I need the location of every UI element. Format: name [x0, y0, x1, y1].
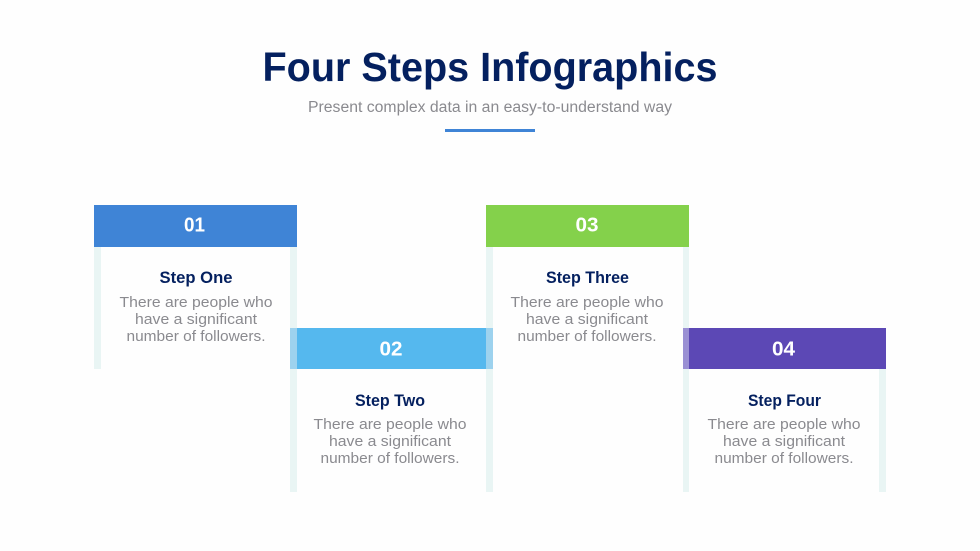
header bar overlap, right: [486, 328, 493, 369]
panel: step one: [94, 205, 297, 369]
heading: step three: Step Three: [546, 269, 629, 287]
body text: step two: [314, 416, 466, 467]
body text: step three: have a significant: [526, 311, 649, 328]
left side strip, step one: [94, 247, 101, 369]
heading: step two: Step Two: [355, 392, 425, 410]
number 03: 03: [576, 214, 598, 236]
header bar 01: [94, 205, 297, 247]
number 04: 04: [772, 338, 796, 360]
body text: step three: There are people who: [510, 294, 664, 311]
title: Four Steps Infographics: [262, 44, 718, 90]
number 01: 01: [184, 214, 205, 236]
body text: step two: There are people who: [314, 416, 466, 433]
header bar overlap, left: [290, 328, 297, 369]
heading: step four: Step Four: [748, 392, 822, 410]
body text: step two: have a significant: [329, 433, 452, 450]
body text: step three: number of followers.: [518, 328, 656, 345]
header bar 02: [290, 328, 493, 369]
body text: step two: number of followers.: [320, 450, 460, 467]
header bar 03: [486, 205, 689, 247]
body text: step four: have a significant: [723, 433, 846, 450]
body text: step one: number of followers.: [126, 328, 266, 345]
right side strip, step two: [486, 369, 493, 492]
header bar 04: [683, 328, 886, 369]
body text: step three: [510, 294, 664, 345]
body text: step four: [708, 416, 860, 467]
body text: step four: There are people who: [708, 416, 860, 433]
body text: step one: have a significant: [135, 311, 258, 328]
subtitle: Present complex data in an easy-to-understand way: [308, 99, 672, 116]
right side strip, step one: [290, 247, 297, 328]
panel: step two: [290, 328, 493, 492]
body text: step four: number of followers.: [714, 450, 854, 467]
header bar overlap, left: [683, 328, 689, 369]
right side strip, step four: [879, 369, 886, 492]
title underline: [445, 129, 535, 132]
body text: step one: There are people who: [120, 294, 272, 311]
left side strip, step three: [486, 247, 493, 328]
panel: step four: [683, 328, 886, 492]
heading: step one: Step One: [160, 269, 232, 287]
left side strip, step four: [683, 369, 689, 492]
number 02: 02: [380, 338, 402, 360]
body text: step one: [120, 294, 272, 345]
right side strip, step three: [683, 247, 689, 328]
panel: step three: [486, 205, 689, 345]
left side strip, step two: [290, 369, 297, 492]
